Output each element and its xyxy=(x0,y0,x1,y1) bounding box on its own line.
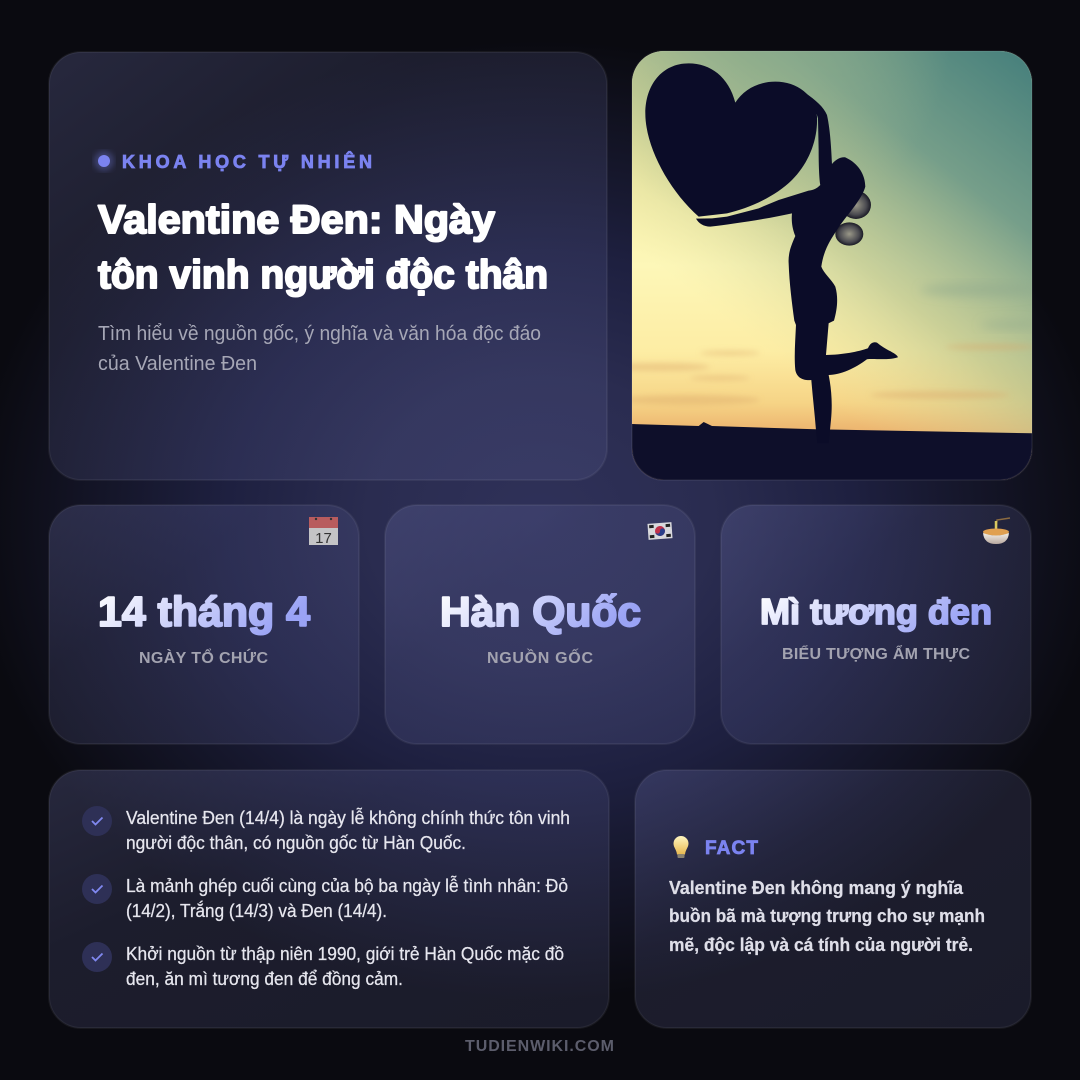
stat label: BIỂU TƯỢNG ẨM THỰC xyxy=(782,644,970,663)
photo border xyxy=(632,51,1032,480)
point 1 xyxy=(82,806,570,853)
panel: stat food xyxy=(721,505,1031,744)
stat label: NGÀY TỔ CHỨC xyxy=(139,648,268,667)
subtitle: của Valentine Đen xyxy=(98,353,257,375)
panel: stat origin xyxy=(385,505,695,744)
fact text: mẽ, độc lập và cá tính của người trẻ. xyxy=(669,935,973,955)
subtitle: Tìm hiểu về nguồn gốc, ý nghĩa và văn hóa độc đáo xyxy=(98,323,541,345)
fact text: buồn bã mà tượng trưng cho sự mạnh xyxy=(669,906,985,926)
icon: noodle bowl xyxy=(983,518,1010,544)
point 2: (14/2), Trắng (14/3) và Đen (14/4). xyxy=(126,900,387,921)
stat value: Hàn Quốc xyxy=(440,588,641,635)
title xyxy=(98,198,548,297)
title: tôn vinh người độc thân xyxy=(98,253,548,297)
icon: light bulb xyxy=(674,836,688,858)
eyebrow label: KHOA HỌC TỰ NHIÊN xyxy=(122,151,372,172)
stat label: NGUỒN GỐC xyxy=(487,647,593,667)
point 1: Valentine Đen (14/4) là ngày lễ không chính thức tôn vinh xyxy=(126,807,570,828)
point 2: Là mảnh ghép cuối cùng của bộ ba ngày lễ tình nhân: Đỏ xyxy=(126,875,568,896)
point 3: đen, ăn mì tương đen để đồng cảm. xyxy=(126,969,403,989)
title: Valentine Đen: Ngày xyxy=(98,198,496,242)
fact label: FACT xyxy=(705,838,758,859)
footer watermark: TUDIENWIKI.COM xyxy=(465,1038,614,1055)
point 1: người độc thân, có nguồn gốc từ Hàn Quốc. xyxy=(126,833,466,853)
point 3 xyxy=(82,942,564,989)
panel: fact xyxy=(635,770,1031,1028)
subtitle xyxy=(98,323,541,375)
point 2 xyxy=(82,874,568,921)
icon: calendar xyxy=(309,517,338,547)
panel: key points xyxy=(49,770,609,1028)
fact text: Valentine Đen không mang ý nghĩa xyxy=(669,878,964,898)
panel: hero card xyxy=(49,52,607,480)
eyebrow dot xyxy=(94,151,114,171)
stat value: 14 tháng 4 xyxy=(98,588,311,635)
stat value: Mì tương đen xyxy=(760,591,992,632)
icon: korean flag xyxy=(647,522,673,540)
panel: stat date xyxy=(49,505,359,744)
icon: calendar: 17 xyxy=(315,530,332,547)
fact text xyxy=(669,878,985,955)
point 3: Khởi nguồn từ thập niên 1990, giới trẻ Hàn Quốc mặc đồ xyxy=(126,944,564,964)
photo: silhouette with heart at sunset xyxy=(610,51,1040,485)
